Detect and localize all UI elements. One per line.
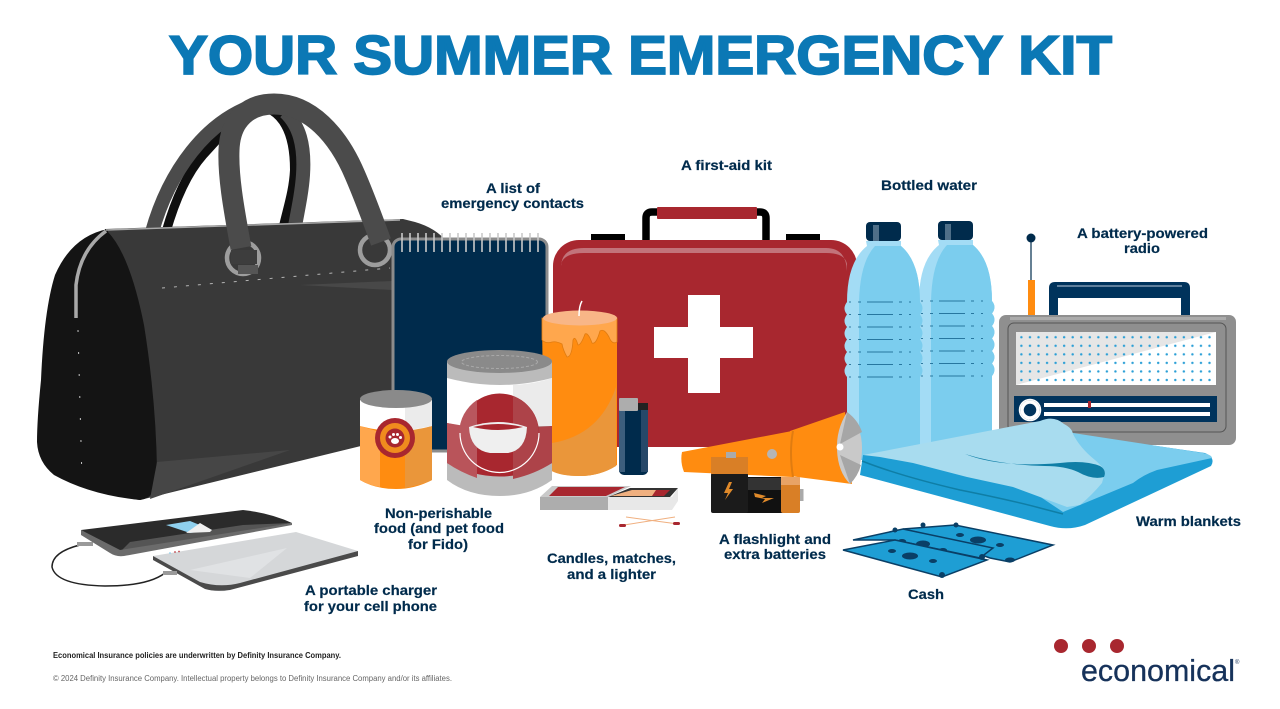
kit cross: [654, 295, 753, 393]
label: first-aid kit: A first-aid kit: [681, 158, 773, 173]
can bowl emblem: [459, 394, 539, 472]
icon: pet food can: [360, 390, 432, 489]
logo: economical: ®: [1235, 659, 1240, 666]
label: food: food (and pet food: [374, 521, 504, 536]
label: contacts: emergency contacts: [441, 196, 584, 211]
label: charger: for your cell phone: [304, 599, 438, 614]
bottle left: [844, 222, 922, 460]
logo: economical: economical: [1081, 653, 1235, 688]
icon: first-aid kit: [553, 207, 857, 447]
icon: lighter: [619, 398, 648, 475]
paw badge: [375, 418, 415, 458]
front bill: [843, 540, 987, 578]
bag rings: [227, 242, 259, 274]
can white label: [447, 378, 552, 426]
label: food: for Fido): [408, 537, 468, 552]
label: food: [374, 506, 504, 552]
icon: matchbox: [540, 486, 680, 527]
label: candles: [547, 551, 676, 582]
loose matches: [619, 517, 680, 527]
can metal: [447, 361, 552, 496]
middle bill: [853, 528, 993, 558]
label: blankets: Warm blankets: [1136, 514, 1241, 529]
label: bottled water: Bottled water: [881, 178, 978, 193]
blanket dark base: [860, 434, 1213, 528]
label: charger: A portable charger: [305, 583, 438, 598]
label: flashlight: [719, 532, 831, 562]
icon: phone and portable charger: [52, 510, 358, 591]
footer: underwriter note: Economical Insurance policies are underwritten by Definity Insurance Company.: [53, 651, 341, 660]
icon: blanket: [860, 419, 1213, 528]
radio tuner: [1014, 396, 1217, 422]
label: cash: Cash: [908, 587, 944, 602]
lying battery: [742, 477, 804, 513]
radio antenna: [1026, 234, 1036, 316]
radio case: [999, 315, 1236, 445]
radio handle: [1049, 282, 1190, 316]
kit handle: [646, 212, 766, 242]
icon: flashlight: [681, 412, 862, 484]
icon: duffel bag: [37, 103, 447, 500]
icon: notebook: [393, 233, 547, 451]
bag front handle: [229, 104, 381, 248]
right bill: [903, 522, 1053, 562]
label: flashlight: A flashlight and: [719, 532, 831, 547]
label: radio: [1077, 226, 1208, 256]
can red label: [447, 423, 552, 476]
title: YOUR SUMMER EMERGENCY KIT: [169, 24, 1112, 86]
standing battery: [711, 452, 748, 513]
blanket top fold: [863, 419, 1105, 507]
icon: large food can: [447, 350, 552, 496]
icon: candle: [542, 301, 617, 476]
label: candles: and a lighter: [567, 567, 657, 582]
label: radio: A battery-powered: [1077, 226, 1208, 241]
icon: batteries: [711, 452, 804, 513]
radio speaker: [1016, 332, 1216, 385]
label: candles: Candles, matches,: [547, 551, 676, 566]
bottle right: [916, 221, 994, 459]
bag end panel: [37, 229, 157, 500]
label: radio: radio: [1124, 241, 1160, 256]
label: flashlight: extra batteries: [724, 547, 826, 562]
bag back handle: [152, 103, 303, 232]
logo: economical: [1054, 639, 1240, 688]
icon: cash: [843, 522, 1053, 578]
icon: bottled water: [844, 221, 994, 460]
label: charger: [304, 583, 438, 614]
kit case: [553, 240, 857, 447]
label: contacts: A list of: [486, 181, 541, 196]
footer: copyright: © 2024 Definity Insurance Company. Intellectual property belongs to Definity Insurance Company and/or its affiliates.: [53, 674, 452, 683]
icon: radio: [999, 234, 1236, 445]
phone: [81, 510, 292, 556]
bag body: [60, 219, 447, 500]
charging cable: [52, 545, 165, 586]
power bank: [153, 532, 358, 591]
bag zipper: [76, 231, 106, 318]
blanket mid layer: [1000, 425, 1212, 512]
label: contacts: [441, 181, 584, 211]
label: food: Non-perishable: [385, 506, 493, 521]
